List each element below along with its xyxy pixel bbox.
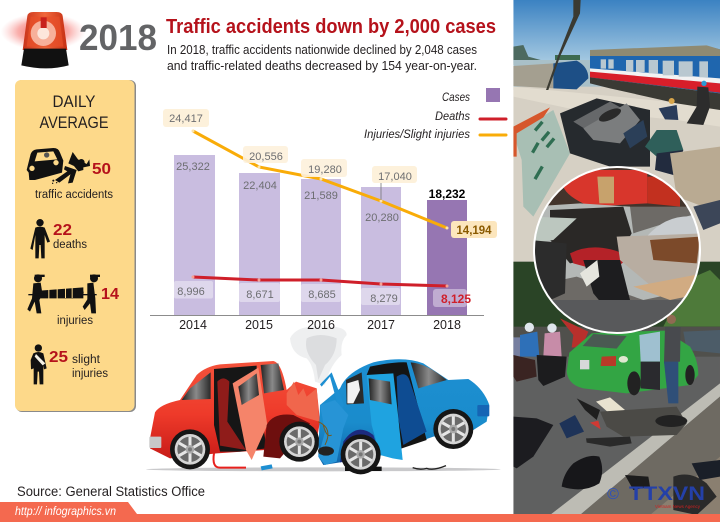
panel: daily average: [15, 80, 136, 412]
intro text: [167, 42, 477, 73]
bars: cases: [174, 155, 467, 315]
legend: [364, 88, 506, 141]
year labels: 2017: [367, 318, 395, 332]
daily average heading: AVERAGE: [40, 113, 108, 132]
line markers: [192, 130, 448, 288]
deaths value labels: 8,685: [308, 289, 336, 301]
injuries value labels: 20,556: [249, 151, 283, 163]
title: Traffic accidents down by 2,000 cases: [166, 16, 496, 38]
debris: [261, 464, 273, 470]
icon: person with arm sling: [31, 344, 47, 384]
chart: accidents, deaths and injuries 2014-2018: 18,232: [429, 187, 466, 201]
taxi: [567, 331, 698, 393]
stat: injuries: injuries: [57, 315, 93, 327]
chart: accidents, deaths and injuries 2014-2018: [150, 109, 497, 332]
stat: slight injuries: 25: [49, 349, 68, 366]
illustration: two crashed cars: [146, 326, 501, 474]
blue car: [318, 359, 489, 474]
injuries line: [193, 131, 447, 228]
watermark: TTXVN logo: ©: [607, 486, 619, 503]
intro text: and traffic-related deaths decreased by 154 year-on-year.: [167, 58, 477, 73]
men: [639, 332, 660, 362]
year heading: 2018: [79, 17, 157, 58]
deaths value labels: [177, 286, 398, 305]
year labels: 2015: [245, 318, 273, 332]
photo inset: car and motorbike crash: [530, 163, 707, 333]
watermark: TTXVN logo: [607, 484, 705, 509]
icon: red siren beacon: [1, 12, 86, 68]
legend: Injuries/Slight injuries: [364, 127, 470, 141]
icon: stretcher bearers: [27, 274, 100, 313]
icon: car hitting motorbike: [27, 148, 90, 184]
tanker: [513, 63, 553, 88]
injuries value labels: 14,194: [456, 225, 492, 237]
photo: street accident with green taxi: [513, 262, 720, 515]
photo: train and truck accident: [513, 0, 720, 263]
chart: accidents, deaths and injuries 2014-2018: 8,125: [441, 292, 471, 306]
injuries value labels: [163, 109, 497, 238]
stat: traffic accidents: [35, 161, 113, 201]
deaths value labels: 8,671: [246, 289, 274, 301]
deaths line: [193, 277, 447, 286]
watermark: TTXVN logo: Vietnam News Agency: [655, 504, 701, 509]
stat: deaths: [53, 222, 87, 251]
truck: [513, 110, 570, 217]
stat: slight injuries: slight: [72, 354, 101, 366]
intro text: In 2018, traffic accidents nationwide declined by 2,048 cases: [167, 42, 477, 57]
cases value labels: 20,280: [365, 212, 399, 224]
stat: slight injuries: [49, 349, 108, 380]
source: Source: General Statistics Office: [17, 484, 205, 499]
red car: [149, 361, 320, 469]
legend: Deaths: [435, 109, 470, 123]
year labels: 2016: [307, 318, 335, 332]
ground shadow: [146, 467, 501, 471]
injuries value labels: 24,417: [169, 113, 203, 125]
train: [590, 46, 720, 93]
stat: traffic accidents: traffic accidents: [35, 189, 113, 201]
stat: injuries: [57, 286, 119, 327]
fallen motorbikes: [577, 398, 600, 420]
sidewalk: [550, 383, 720, 515]
injuries value labels: 17,040: [378, 171, 412, 183]
stat: slight injuries: injuries: [72, 368, 108, 380]
riders: [520, 332, 539, 357]
deaths value boxes: [174, 281, 467, 307]
year labels: 2018: [433, 318, 461, 332]
cases value labels: 22,404: [243, 180, 277, 192]
stat: injuries: 14: [101, 286, 119, 303]
watermark: TTXVN logo: TTXVN: [629, 484, 705, 505]
workers: [645, 130, 684, 156]
cases value labels: [176, 161, 399, 224]
year labels: [179, 318, 461, 332]
footer bar with website: http:// infographics.vn: [15, 504, 116, 518]
cases value labels: 21,589: [304, 190, 338, 202]
footer bar with website: [0, 502, 720, 522]
smoke: [290, 326, 347, 385]
icon: person: [30, 219, 50, 258]
stat: deaths: 22: [53, 222, 72, 239]
legend: Cases: [442, 90, 470, 104]
deaths value labels: 8,996: [177, 286, 205, 298]
injuries value labels: 19,280: [308, 164, 342, 176]
stat: deaths: deaths: [53, 239, 87, 251]
daily average heading: [40, 92, 108, 132]
daily average heading: DAILY: [52, 92, 96, 111]
cases value labels: 25,322: [176, 161, 210, 173]
year labels: 2014: [179, 318, 207, 332]
stat: traffic accidents: 50: [92, 161, 111, 178]
deaths value labels: 8,279: [370, 293, 398, 305]
